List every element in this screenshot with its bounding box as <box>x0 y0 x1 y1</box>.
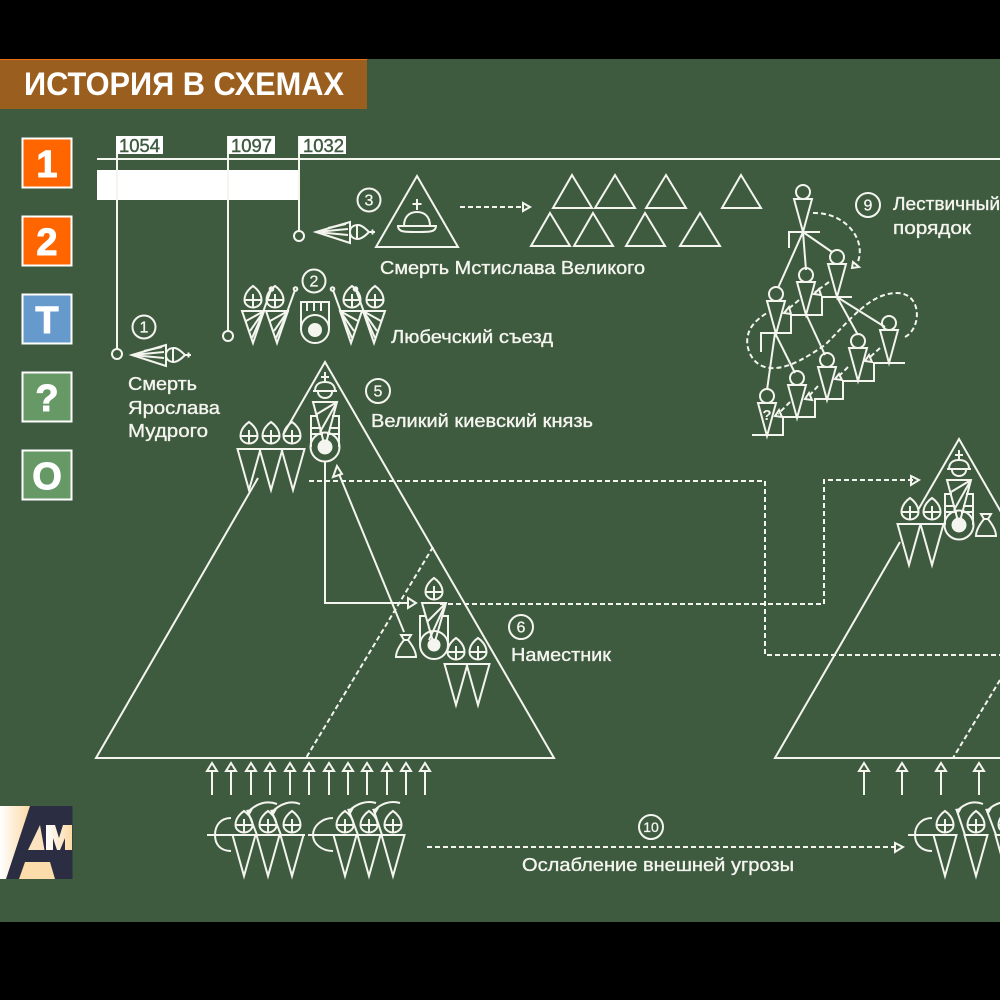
people group 2 <box>308 802 405 876</box>
event 2: Lyubech congress: 2 <box>310 274 319 290</box>
upward arrows left <box>207 763 430 795</box>
tile T <box>22 294 72 344</box>
tile T: Т <box>35 300 59 342</box>
people group 1 <box>207 802 305 876</box>
event 3: death of Mstislav <box>316 176 645 278</box>
year 1097: 1097 <box>231 136 272 156</box>
ladder order diagram: ? <box>762 407 772 424</box>
sidebar tiles <box>22 138 72 500</box>
event 1: death of Yaroslav: Смерть <box>128 374 197 394</box>
grand prince figure <box>310 372 593 462</box>
tile O: О <box>32 456 62 498</box>
tile O <box>22 450 72 500</box>
external threat arrow and label: 10 <box>643 819 659 835</box>
logo <box>0 806 72 879</box>
prince retinue <box>238 422 304 490</box>
event 2: Lyubech congress: Любечский съезд <box>391 327 554 347</box>
tile question: ? <box>35 378 59 420</box>
tile 2 <box>22 216 72 266</box>
ladder order diagram: 9 <box>864 198 873 214</box>
governor figure <box>396 578 611 705</box>
small principalities triangles <box>531 175 761 246</box>
external threat arrow and label: Ослабление внешней угрозы <box>522 855 794 875</box>
event 3: death of Mstislav: 3 <box>365 192 374 210</box>
event 1: death of Yaroslav <box>128 316 221 441</box>
title <box>0 59 367 109</box>
year 1032: 1032 <box>303 136 344 156</box>
ladder order diagram <box>747 185 1000 436</box>
timeline <box>97 136 1000 359</box>
tile question <box>22 372 72 422</box>
tile 1: 1 <box>36 144 58 186</box>
event 1: death of Yaroslav: Мудрого <box>128 421 208 441</box>
grand prince figure: 5 <box>374 384 383 400</box>
grand prince figure: Великий киевский князь <box>371 411 593 431</box>
tile 2: 2 <box>36 222 58 264</box>
external threat arrow and label <box>427 815 903 875</box>
ladder order diagram: Лествичный <box>893 194 1000 214</box>
ladder order diagram: порядок <box>893 218 971 238</box>
event 1: death of Yaroslav: 1 <box>140 320 149 336</box>
arrow to fragmented principalities <box>460 203 530 211</box>
tile 1 <box>22 138 72 188</box>
governor figure: Наместник <box>511 645 611 665</box>
year 1054: 1054 <box>119 136 160 156</box>
bottom black band <box>0 922 1000 1000</box>
event 1: death of Yaroslav: Ярослава <box>128 398 221 418</box>
people group 3 <box>908 802 1000 876</box>
left big pyramid <box>96 362 554 758</box>
title: ИСТОРИЯ В СХЕМАХ <box>24 66 345 102</box>
event 3: death of Mstislav: Смерть Мстислава Великого <box>380 258 645 278</box>
upward arrows right <box>859 763 984 795</box>
dashed connections to right pyramid <box>309 476 1000 655</box>
event 2: Lyubech congress <box>242 270 554 347</box>
right big pyramid <box>775 439 1000 758</box>
governor figure: 6 <box>517 620 526 636</box>
appointment arrows <box>325 462 416 632</box>
